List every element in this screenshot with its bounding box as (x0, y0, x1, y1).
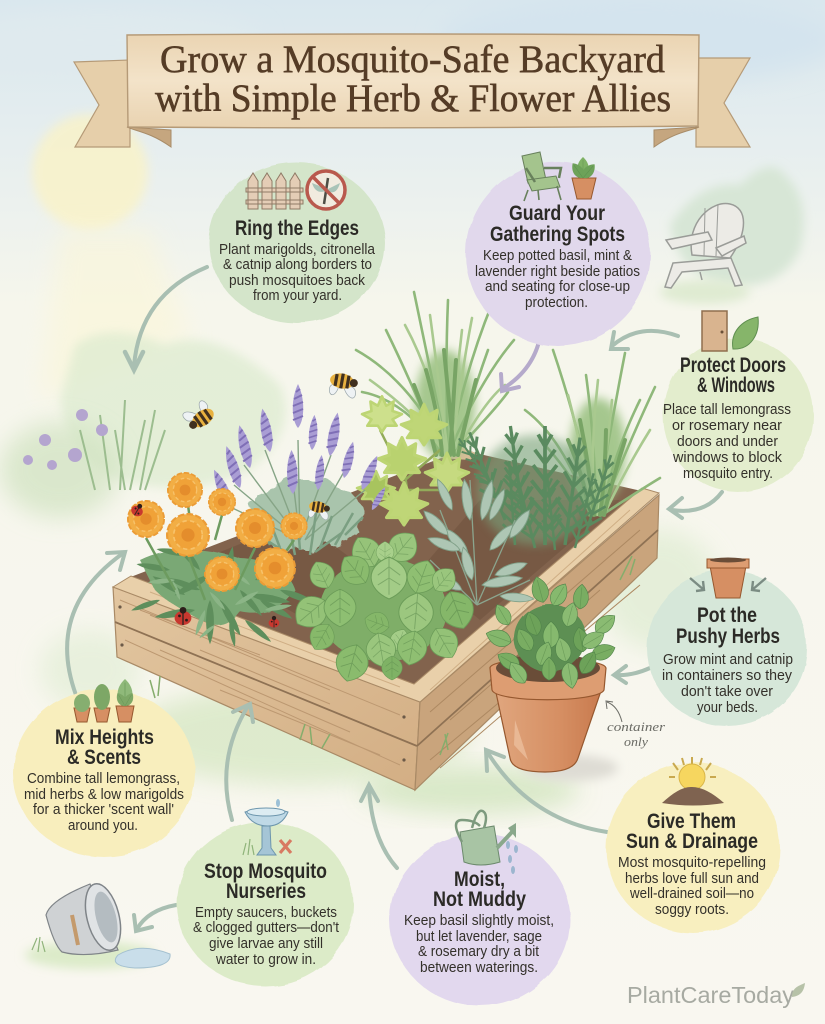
body text: & catnip along borders to (223, 257, 372, 273)
body text: Combine tall lemongrass, (27, 771, 180, 787)
body text: Most mosquito-repelling (618, 855, 766, 871)
body text: mosquito entry. (683, 466, 773, 482)
heading: Gathering Spots (490, 223, 625, 246)
heading: Not Muddy (433, 888, 526, 911)
soil (128, 450, 646, 690)
right wood face (415, 495, 659, 790)
body text: but let lavender, sage (416, 929, 542, 945)
heading: Mix Heights (55, 726, 154, 749)
grass tufts (150, 556, 635, 755)
icon: bird bath (243, 799, 288, 855)
body text: water to grow in. (215, 952, 316, 968)
heading: Give Them (647, 810, 736, 833)
icon: door (702, 311, 727, 351)
panel: give them sun and drainage (606, 757, 780, 933)
icon: potted plant (569, 157, 598, 199)
panel: mix heights and scents (13, 679, 195, 857)
body text (24, 771, 184, 834)
raised garden bed (113, 447, 659, 790)
icon: red cross (280, 840, 291, 853)
body text: around you. (68, 818, 138, 834)
left wood face (113, 587, 420, 790)
body text: from your yard. (253, 288, 342, 304)
heading (676, 604, 780, 648)
arrow: moist not muddy (361, 785, 397, 868)
icon: terracotta pot (707, 558, 749, 598)
body text: herbs love full sun and (625, 871, 759, 887)
heading: Stop Mosquito (204, 860, 327, 883)
body text: Place tall lemongrass (663, 402, 791, 418)
body text: or rosemary near (672, 418, 782, 434)
arrow: guard gathering spots to garden (501, 322, 542, 391)
heading: Pushy Herbs (676, 625, 780, 648)
body text: push mosquitoes back (229, 273, 366, 289)
arrow: mix heights (67, 552, 125, 695)
arrow: sun and drainage (486, 750, 607, 832)
pot with mint (483, 575, 620, 781)
body text: in containers so they (662, 668, 793, 684)
logo: PlantCareToday: PlantCareToday (627, 982, 795, 1008)
ladybugs (129, 501, 279, 628)
heading: & Windows (697, 374, 775, 397)
body text: protection. (525, 295, 588, 311)
body text: Keep potted basil, mint & (483, 248, 632, 264)
heading (55, 726, 154, 769)
heading (204, 860, 327, 903)
icon: sun over soil (662, 757, 724, 806)
body text: your beds. (697, 700, 758, 716)
icon: watering can (456, 811, 518, 874)
arrow: stop nurseries to bed (226, 704, 253, 820)
panel: protect doors and windows (663, 311, 813, 492)
body text (662, 652, 793, 716)
heading: Sun & Drainage (626, 830, 758, 853)
icon: leaf (733, 317, 758, 349)
icon: fence (246, 173, 303, 209)
body text: doors and under (677, 434, 778, 450)
heading: Protect Doors (680, 354, 786, 377)
headline (155, 38, 671, 120)
body text: lavender right beside patios (475, 264, 640, 280)
body text (663, 402, 791, 482)
body text: don't take over (681, 684, 773, 700)
heading: Ring the Edges (235, 217, 359, 240)
body text: & rosemary dry a bit (418, 944, 539, 960)
body text: and seating for close-up (485, 279, 630, 295)
panel: stop mosquito nurseries (177, 799, 353, 986)
heading: Moist, (454, 868, 505, 891)
plant: basil (287, 525, 479, 685)
plant: marigolds (128, 473, 316, 647)
heading (490, 202, 625, 246)
plant: lemongrass back (356, 292, 514, 460)
panel: moist, not muddy (390, 811, 570, 1006)
heading: Nurseries (226, 880, 306, 903)
banner ribbon (127, 34, 699, 128)
background Adirondack chair (665, 204, 746, 288)
background garden: distant flowers left (23, 400, 165, 490)
icon: green chair (522, 152, 561, 201)
body text: give larvae any still (209, 936, 323, 952)
banner right tail (696, 58, 750, 147)
plant: parsley-leaf citronella (357, 396, 469, 525)
body text (219, 242, 376, 304)
banner left tail (74, 60, 130, 147)
body text: & clogged gutters—don't (193, 920, 339, 936)
body text (618, 855, 766, 918)
body text: well-drained soil—no (629, 886, 754, 902)
body text: Empty saucers, buckets (195, 905, 337, 921)
arrow: stop nurseries to bucket (134, 905, 176, 931)
title banner (74, 34, 750, 147)
icon: tipped bucket and puddle (25, 880, 170, 969)
plant: sage (421, 477, 534, 605)
body text: soggy roots. (655, 902, 729, 918)
body text (193, 905, 339, 968)
bees (181, 372, 359, 520)
banner folds (127, 127, 699, 147)
body text: between waterings. (420, 960, 538, 976)
panel: guard your gathering spots (466, 152, 650, 346)
heading: & Scents (67, 746, 141, 769)
body text: Keep basil slightly moist, (404, 913, 554, 929)
heading: Pot the (697, 604, 757, 627)
body text: Plant marigolds, citronella (219, 242, 376, 258)
icon: pushing arrows (690, 578, 766, 591)
arrow: pot to mint (614, 666, 650, 683)
plant: lavender (209, 384, 388, 555)
top rim (113, 488, 659, 702)
body text (475, 248, 640, 311)
heading (433, 868, 526, 911)
heading: Guard Your (509, 202, 605, 225)
heading (680, 354, 786, 397)
plant: rosemary (452, 424, 621, 551)
body text: mid herbs & low marigolds (24, 787, 184, 803)
heading (626, 810, 758, 853)
headline: with Simple Herb & Flower Allies (155, 77, 671, 120)
body text (404, 913, 554, 976)
handwritten note: container only: container (607, 719, 666, 734)
arrow: ring the edges to garden (125, 267, 207, 370)
panel: pot the pushy herbs (647, 558, 807, 726)
body text: windows to block (672, 450, 783, 466)
icon: crossed mosquito (307, 171, 345, 209)
arrow: protect doors top (611, 331, 678, 349)
body text: Grow mint and catnip (663, 652, 793, 668)
handwritten note: container only: only (624, 734, 648, 749)
arrow: protect doors bottom (669, 492, 722, 518)
plant: lemongrass right (525, 350, 660, 515)
headline: Grow a Mosquito-Safe Backyard (160, 38, 665, 81)
icon: three potted herbs (74, 679, 136, 722)
panel: ring the edges (209, 163, 385, 323)
handwritten note: container only (606, 701, 666, 749)
body text: for a thicker 'scent wall' (33, 802, 174, 818)
